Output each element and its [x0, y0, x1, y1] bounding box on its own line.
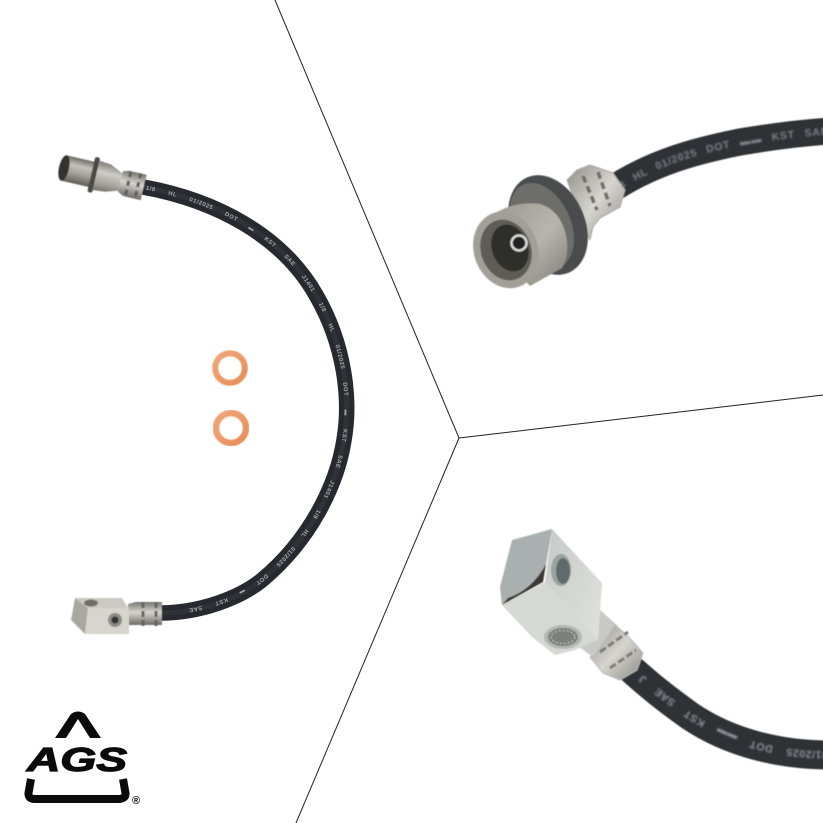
- crimped ferrule: [590, 625, 643, 680]
- hose body with printed markings: 1/8 HL 01/2025 DOT ▬ KST SAE J1401 1/8 HL 01/2025 DOT ▬ KST SAE J1401 1/8 HL 01/2025 DOT ▬ KST SAE: [146, 186, 348, 612]
- logo wordmark: AGS: [26, 741, 127, 778]
- neck between block and ferrule: [578, 608, 618, 660]
- copper washer bottom: [216, 413, 246, 443]
- registered mark: ®: [132, 795, 140, 807]
- divider lines between panels: [275, 0, 823, 823]
- crimped ferrule: [567, 165, 625, 240]
- hose close-up: 8 HL 01/2025 DOT ▬▬ KST SAE: [620, 126, 823, 188]
- block: hex end: [500, 529, 552, 605]
- block: hex shadow: [502, 564, 546, 605]
- logo: AGS: [26, 712, 140, 807]
- bottom banjo fitting: [71, 598, 162, 634]
- block: bottom face with threaded port: [502, 582, 598, 655]
- mounting washer and hex: [493, 162, 603, 288]
- panel: top fitting close-up: [472, 117, 823, 289]
- panel: banjo fitting close-up: [500, 528, 823, 770]
- logo bottom bracket: [28, 779, 126, 799]
- block: side face with hole: [545, 529, 602, 640]
- copper washer top: [215, 353, 245, 383]
- logo top chevron: [55, 712, 101, 738]
- cylinder front face: [463, 202, 549, 298]
- hose close-up: 01/2025 DOT ▬▬ KST SAE J: [638, 675, 823, 760]
- top fitting: [55, 149, 148, 204]
- cylinder body: [485, 203, 567, 286]
- panel: complete brake hose: [58, 154, 354, 634]
